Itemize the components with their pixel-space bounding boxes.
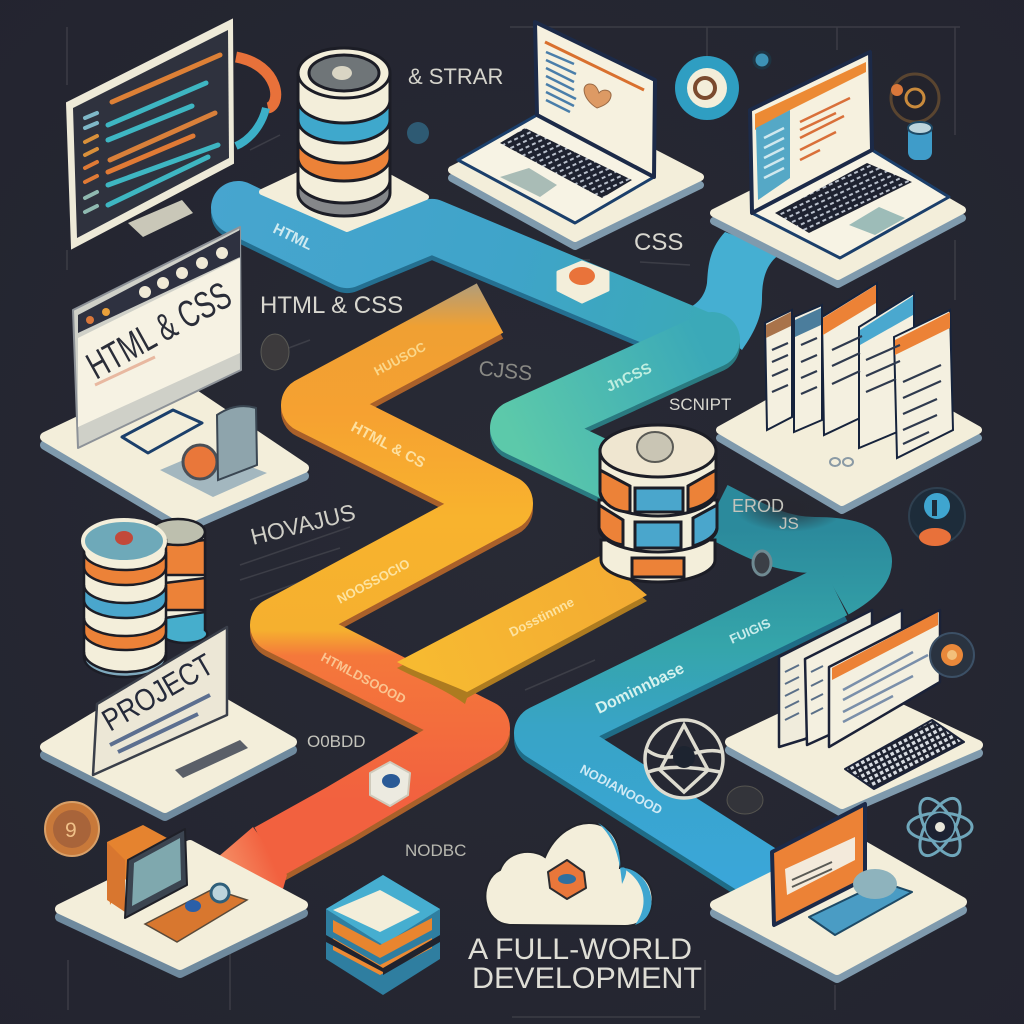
- road labels: HUUSOC: [371, 339, 429, 379]
- road labels: HTML: [270, 220, 315, 254]
- connector road: yellow branch: [397, 556, 647, 704]
- label: CSS: CSS: [634, 229, 683, 256]
- heading: strapline: & STRAR: [408, 64, 503, 89]
- label: CSS faint: CJSS: [477, 357, 533, 386]
- panel: bottom-left project platform: [60, 825, 303, 973]
- icon: cloud: [485, 823, 653, 926]
- label: script: SCNIPT: [669, 395, 731, 414]
- panel: documents platform: [720, 283, 978, 510]
- label: oobdd: O0BDD: [307, 732, 366, 751]
- icon: document pages: [765, 283, 953, 458]
- project board: [93, 627, 227, 775]
- icon: top right badge and cylinder: [891, 74, 939, 160]
- icon: stacked box: [326, 875, 440, 995]
- icon: orange coin: 9: [65, 819, 77, 842]
- label: node: NODBC: [405, 841, 466, 860]
- icon: database cylinders: [83, 519, 207, 677]
- panel: project platform with database: [45, 519, 292, 816]
- road labels: [270, 220, 773, 817]
- icon: globe: [645, 720, 723, 798]
- icon: node on blue path: [558, 262, 608, 302]
- road labels: HTML & CS: [348, 419, 428, 472]
- icon: heart: [584, 84, 611, 108]
- icon: small logo near strapline: [407, 122, 429, 144]
- heading: HTML & CSS: HTML & CSS: [260, 292, 403, 319]
- panel: middle database stack: [599, 425, 717, 582]
- panel: top laptop: [452, 22, 700, 246]
- connector road: teal path: [518, 340, 712, 491]
- panel: HTML & CSS monitor: HTML & CSS: [80, 275, 239, 388]
- icon: orange coin: [45, 802, 99, 856]
- label: JS: JS: [779, 514, 799, 533]
- connector road: orange, yellow and red winding path: [268, 308, 505, 858]
- icon: top database stack: [298, 48, 390, 216]
- panel: HTML & CSS monitor: [45, 227, 304, 528]
- icon: hex node on red path: [370, 762, 410, 806]
- title: [468, 933, 702, 995]
- label: hovajus: HOVAJUS: [248, 499, 358, 550]
- icon: atom: [908, 792, 972, 862]
- connector road: lower blue path: [542, 510, 864, 884]
- road labels: HTMLDSOOOD: [319, 649, 409, 707]
- icon: capsule ring near path: [753, 551, 771, 575]
- panel: bottom-right laptop: [715, 804, 962, 978]
- small glyph on platform: [830, 458, 853, 466]
- icon: right middle badge: [909, 488, 965, 546]
- road labels: Dosstinnne: [507, 594, 576, 640]
- connector road: blue riser to laptop: [689, 232, 782, 350]
- road labels: FUIGIS: [727, 615, 773, 647]
- icon: small blue dot: [754, 52, 770, 68]
- icon: capsule near globe: [727, 786, 763, 814]
- panel: top database platform: [262, 48, 426, 229]
- title: DEVELOPMENT: [472, 962, 702, 995]
- title: A FULL-WORLD: [468, 933, 692, 966]
- icon: round eye badge: [675, 56, 739, 120]
- dark fade over blue bend: [735, 484, 845, 532]
- label: error: EROD: [732, 496, 784, 516]
- connector road: red tail to project: [197, 827, 287, 889]
- project board: PROJECT: [96, 647, 219, 738]
- road labels: Dominnbase: [593, 660, 687, 718]
- road labels: NOOSSOCIO: [334, 556, 412, 607]
- road labels: JnCSS: [604, 360, 655, 396]
- panel: top-right laptop: [714, 52, 962, 284]
- panel: top-left monitor: [67, 20, 276, 248]
- connector road: top blue path: [238, 208, 705, 345]
- small bar on platform: [175, 740, 248, 778]
- road labels: NODIANOOOD: [578, 761, 665, 817]
- panel: keyboard platform: [730, 610, 978, 812]
- small icon near heading: [261, 334, 289, 370]
- icon: small server widget: [160, 406, 267, 497]
